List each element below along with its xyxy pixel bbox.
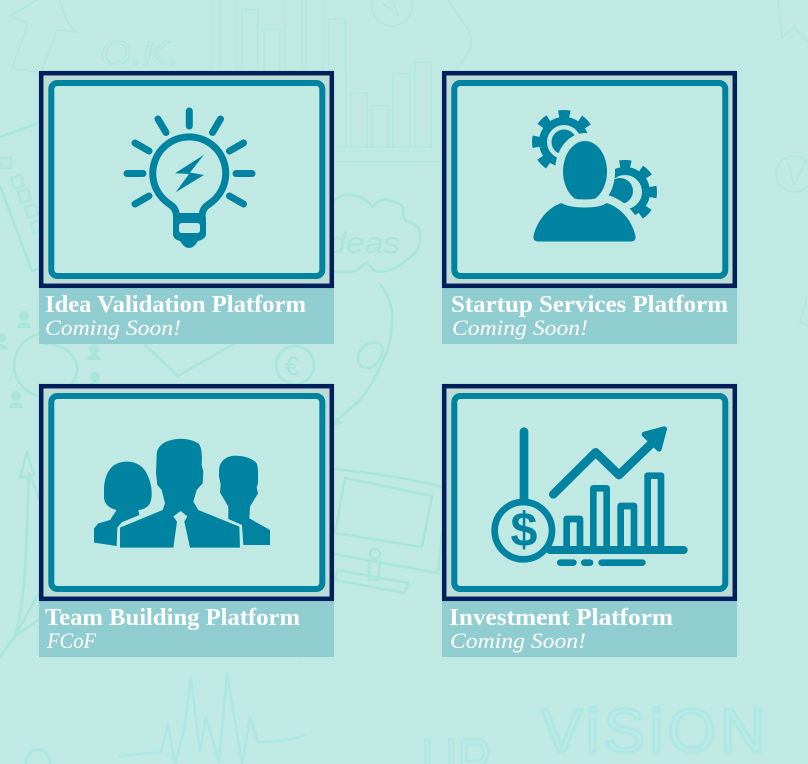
- status: Coming Soon!: [452, 315, 588, 340]
- icon: team silhouettes: [94, 439, 270, 548]
- icon: person with gears: [525, 109, 658, 252]
- caption panel: [39, 601, 334, 657]
- icon: light bulb: [127, 111, 252, 248]
- title: Team Building Platform: [45, 605, 300, 631]
- background sketches: ViSiON: [541, 697, 765, 764]
- frame: [444, 386, 735, 599]
- background sketches: O.K.: [100, 35, 180, 73]
- icon: investment chart: [495, 429, 684, 563]
- card: Idea Validation Platform: [39, 73, 334, 344]
- icon: investment chart: $: [511, 503, 538, 557]
- status: FCoF: [46, 628, 97, 653]
- status: Coming Soon!: [450, 628, 586, 653]
- status: Coming Soon!: [45, 315, 181, 340]
- background sketches: Ideas: [318, 227, 400, 260]
- title: Investment Platform: [449, 605, 673, 631]
- frame: [41, 73, 332, 286]
- card: Team Building Platform: [39, 386, 334, 657]
- frame: [444, 73, 735, 286]
- caption panel: [39, 288, 334, 344]
- background sketches: €: [285, 351, 300, 381]
- title: Startup Services Platform: [451, 292, 728, 318]
- card: Investment Platform: [442, 386, 737, 657]
- card: Startup Services Platform: [442, 73, 737, 344]
- title: Idea Validation Platform: [45, 292, 306, 318]
- caption panel: [442, 601, 737, 657]
- frame: [41, 386, 332, 599]
- caption panel: [442, 288, 737, 344]
